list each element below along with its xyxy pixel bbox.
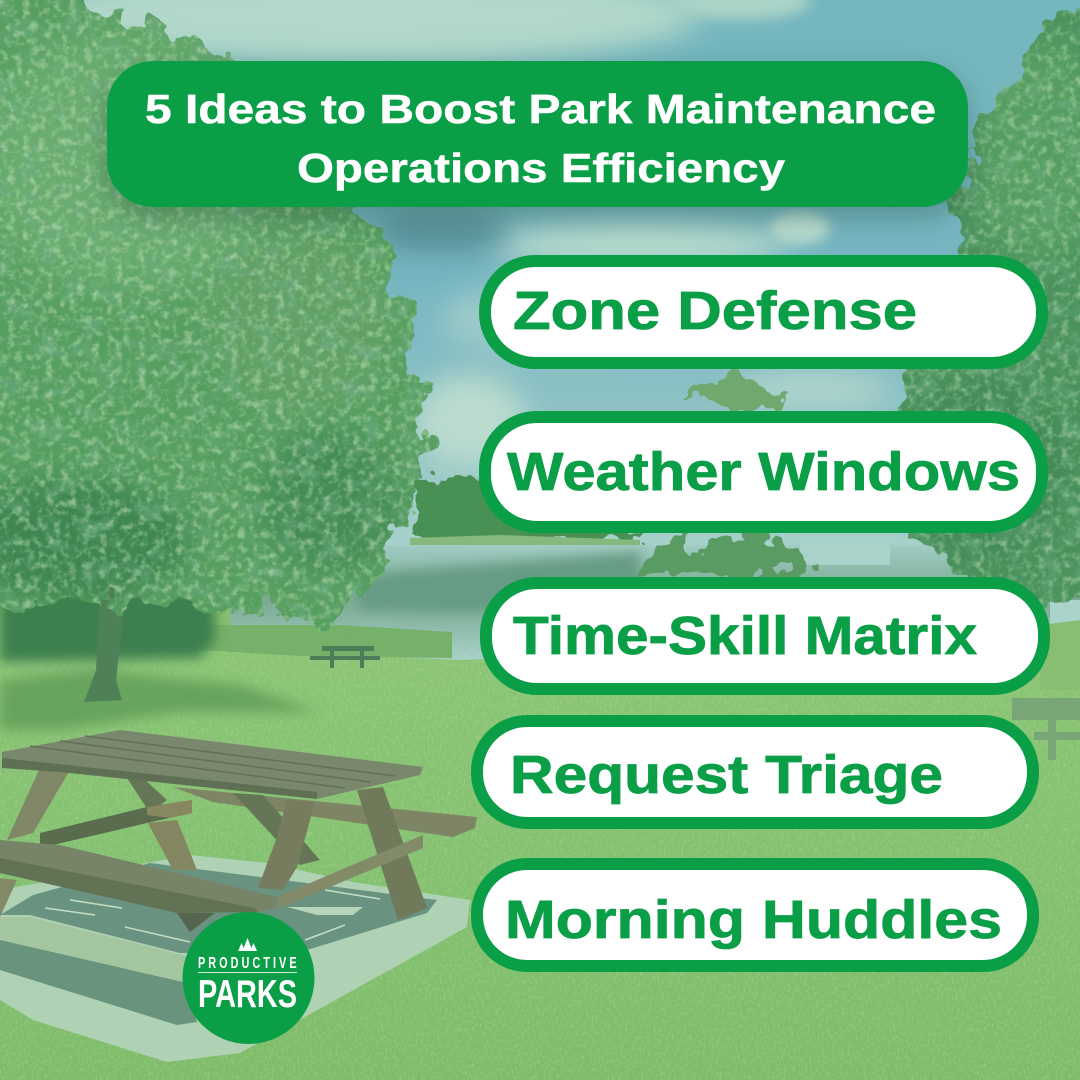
front bench xyxy=(0,840,277,913)
leg and rail right xyxy=(258,800,315,890)
right bench xyxy=(1012,698,1080,760)
table top xyxy=(2,730,423,799)
title line 2: Operations Efficiency xyxy=(297,145,785,191)
distant treeline xyxy=(405,470,640,546)
concrete slab xyxy=(0,855,470,1062)
title line 1: 5 Ideas to Boost Park Maintenance xyxy=(145,86,936,132)
idea pill: Zone Defense xyxy=(485,261,1042,363)
icon: pine trees xyxy=(238,938,257,951)
back diagonal braces xyxy=(233,793,320,865)
small centre tree xyxy=(635,375,815,575)
large left tree xyxy=(0,0,440,635)
inner leg xyxy=(148,820,197,870)
sky and clouds xyxy=(0,0,1080,560)
lake xyxy=(230,543,1080,660)
distant picnic table xyxy=(310,646,380,668)
idea pill: Request Triage: Request Triage xyxy=(510,745,943,805)
idea pill: Morning Huddles xyxy=(477,864,1033,966)
idea pill: Weather Windows xyxy=(485,417,1042,527)
idea pill: Time-Skill Matrix: Time-Skill Matrix xyxy=(513,606,977,666)
long rail xyxy=(40,800,192,848)
idea pill: Weather Windows: Weather Windows xyxy=(507,442,1020,502)
left leg xyxy=(7,768,70,840)
hedge under left tree xyxy=(0,590,215,662)
idea pill: Zone Defense: Zone Defense xyxy=(513,281,917,341)
trunk of left tree xyxy=(84,585,127,702)
far bench xyxy=(173,787,477,837)
idea pill: Morning Huddles: Morning Huddles xyxy=(505,890,1002,950)
grass field xyxy=(0,620,1080,1080)
idea pill: Request Triage xyxy=(477,721,1033,823)
title banner xyxy=(107,61,968,218)
logo word: Productive: PRODUCTIVE xyxy=(198,954,297,972)
right trees xyxy=(898,8,1080,610)
picnic table xyxy=(0,730,477,932)
idea pill: Time-Skill Matrix xyxy=(486,583,1044,689)
logo word: Parks: PARKS xyxy=(198,973,297,1016)
logo badge: Productive Parks xyxy=(182,912,314,1044)
